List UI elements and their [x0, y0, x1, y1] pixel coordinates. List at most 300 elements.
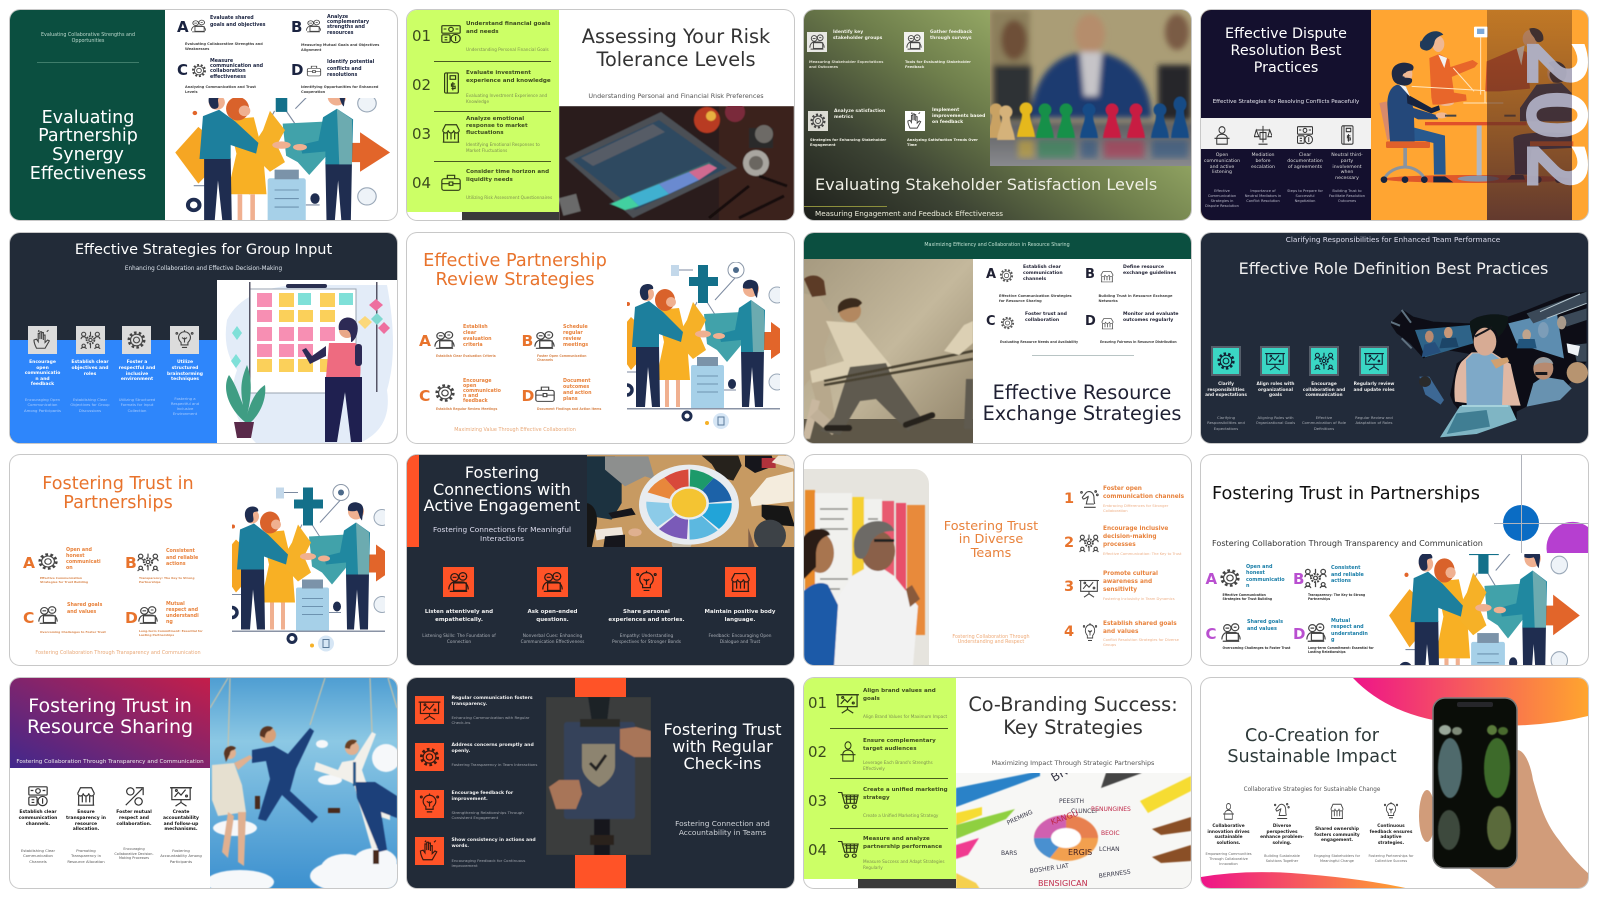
heading 3: Encourage [1311, 382, 1337, 387]
heading B: Analyze [327, 15, 348, 20]
heading B [327, 14, 369, 36]
heading 2: decision-making [1103, 534, 1157, 540]
letter B: B [1085, 267, 1095, 282]
note 04: Regularly [863, 865, 883, 870]
markers and mind map photo: BOSHER LIAT [1029, 863, 1070, 875]
panel: Fostering Trust with Regular Check-ins [407, 678, 794, 888]
number 01: 01 [412, 27, 431, 45]
heading 4: Continuous [1377, 824, 1405, 829]
note 1: Innovation [1219, 862, 1238, 866]
icon tile: stars and hands [415, 837, 444, 865]
heading 2 [66, 810, 106, 833]
icon: bulb [1383, 802, 1399, 820]
heading D: Identify potential [327, 60, 374, 65]
icon: money [1296, 125, 1314, 145]
heading 1: transparency. [452, 702, 487, 707]
heading 1: Regular communication fosters [452, 696, 533, 701]
heading 1: innovation drives [1207, 830, 1250, 835]
number 4: 4 [1064, 624, 1074, 640]
description 04: Utilizing Risk Assessment Questionnaires [466, 195, 552, 200]
note 4 [1368, 854, 1414, 864]
heading A: criteria [463, 343, 483, 348]
heading 4: language. [725, 617, 755, 623]
title [983, 383, 1181, 424]
title: Check-ins [684, 754, 761, 773]
description D [301, 85, 378, 94]
heading 01: Align brand values and [863, 688, 936, 694]
heading 3: collaboration and [1303, 388, 1345, 393]
icon: people [306, 20, 321, 32]
heading B [563, 325, 588, 349]
heading 2 [930, 30, 972, 41]
subtitle: Fostering Collaboration Through Transparency and Communication [1212, 538, 1483, 548]
item 1 note: Dispute Resolution [1205, 204, 1239, 208]
note 2: Effective Communication: The Key to Trust [1103, 552, 1181, 556]
title: Active Engagement [424, 496, 580, 515]
note 4 [160, 848, 202, 864]
heading D: Mutual [166, 602, 185, 607]
description C: Levels [185, 90, 198, 94]
handshake illustration [175, 98, 390, 220]
heading 3 [1314, 827, 1360, 844]
description 1: and Outcomes [809, 65, 838, 69]
item 4 text: necessary [1335, 176, 1359, 181]
title: Effective Strategies for Group Input [75, 242, 332, 258]
heading 3: Promote cultural [1103, 571, 1158, 577]
heading 2: solving. [1272, 841, 1292, 846]
heading 1: open [36, 366, 49, 371]
heading 02: experience and knowledge [466, 78, 551, 84]
heading C: collaboration [1025, 318, 1059, 323]
note B: Partnerships [139, 580, 161, 584]
icon: speaker [1214, 126, 1230, 145]
heading 3: Foster a [127, 360, 147, 365]
heading 01: and needs [466, 29, 499, 35]
footer: Maximizing Value Through Effective Collaboration [454, 427, 576, 433]
subtitle: Opportunities [72, 38, 104, 44]
icon: people [1305, 622, 1327, 643]
letter A: A [986, 267, 996, 282]
icon: target [839, 740, 857, 762]
heading B [1123, 265, 1176, 277]
subtitle: Evaluating Collaborative Strengths and [41, 33, 135, 38]
title: with Regular [672, 737, 773, 756]
note D [1308, 646, 1374, 654]
icon: people [137, 605, 159, 625]
title: Co-Creation for [1245, 726, 1379, 746]
heading B: actions [166, 562, 186, 567]
heading C: and values [1247, 626, 1277, 632]
title: Fostering Trust in Partnerships [1212, 484, 1480, 504]
dark footer strip [462, 212, 559, 221]
heading 1: Collaborative [1212, 824, 1245, 829]
note 3: Encouraging [123, 847, 145, 851]
heading A: honest [66, 554, 85, 559]
note 4 [171, 396, 199, 416]
heading A: n [1246, 583, 1249, 589]
note 3: Empathy: Understanding [620, 634, 673, 639]
heading 1: feedback [31, 382, 54, 387]
heading 2: allocation. [73, 827, 99, 832]
item 3 note [1287, 189, 1323, 204]
title: Effectiveness [30, 164, 146, 184]
note 2: Promoting [76, 848, 96, 853]
heading B: resources [327, 31, 354, 36]
icon tile: bulb [415, 790, 444, 818]
heading 4: Show consistency in actions and [452, 838, 536, 843]
panel: Effective Partnership Review Strategies [407, 233, 794, 443]
navy side panel [1201, 10, 1371, 221]
note C: Overcoming Challenges to Foster Trust [1222, 646, 1290, 650]
heading 1 [833, 30, 882, 41]
markers and mind map photo: BERRNESS [1098, 869, 1131, 880]
note D: Long-term Commitment: Essential for [1308, 646, 1374, 650]
item 4 text: when [1341, 170, 1353, 175]
heading 4: Establish shared goals [1103, 621, 1177, 627]
note 3: Formats for Input [121, 402, 153, 407]
note 2 [1256, 414, 1295, 426]
item 3 note: Negotiation [1295, 199, 1315, 203]
note 1 [1207, 414, 1245, 431]
title: Partnerships [63, 493, 173, 513]
panel: Fostering Connections with Active Engagement [407, 455, 794, 665]
number 02: 02 [412, 76, 431, 94]
panel: Assessing Your Risk Tolerance Levels [407, 10, 794, 220]
letter A: A [177, 18, 189, 36]
note A [1222, 593, 1272, 601]
acrobats in the sky photo [210, 678, 397, 889]
heading 3: Foster mutual [116, 810, 152, 815]
letter B: B [1293, 570, 1304, 588]
heading B [1331, 565, 1364, 585]
description A: Evaluating Collaborative Strengths and [185, 42, 263, 46]
subtitle: Fostering Collaboration Through Transparency and Communication [16, 759, 204, 765]
note B: Channels [537, 358, 553, 362]
title [663, 721, 782, 772]
icon tile: gears [415, 743, 444, 771]
title: Synergy [52, 145, 124, 165]
heading 04: Consider time horizon and [466, 169, 549, 175]
note 4: Feedback: Encouraging Open [708, 634, 772, 639]
markers and mind map photo: ERGIS [1068, 848, 1092, 857]
heading 3: Shared ownership [1315, 827, 1359, 832]
note 3 [1314, 854, 1360, 864]
note B: Building Trust in Resource Exchange [1098, 294, 1172, 298]
heading 03: Analyze emotional [466, 116, 524, 122]
subtitle: Fostering Connection and [675, 819, 770, 828]
letter D: D [1293, 625, 1305, 643]
description 2 [905, 60, 971, 69]
heading D: outcomes regularly [1123, 318, 1173, 323]
title: Fostering [465, 463, 539, 482]
note 2: Resource Allocation [67, 859, 105, 864]
title [424, 465, 580, 515]
heading 1: Encourage [29, 360, 56, 365]
icon: money [441, 25, 461, 44]
footer: Understanding and Respect [958, 640, 1024, 645]
note 1: Check-ins [452, 720, 470, 725]
title: Resource Sharing [27, 716, 193, 738]
note 1: Communication [28, 402, 57, 407]
heading 1: stakeholder groups [833, 36, 882, 41]
heading 03 [863, 786, 948, 802]
title: Effective Dispute [1225, 26, 1347, 42]
icon: gear [192, 64, 206, 78]
description B: Measuring Mutual Goals and Objectives [301, 43, 379, 47]
heading 1: communication [19, 816, 57, 821]
handshake illustration [1387, 554, 1588, 666]
note B: Transparency: The Key to Strong [139, 576, 194, 580]
subtitle: Enhancing Collaboration and Effective Decision-Making [125, 266, 282, 272]
item 4 text: party [1341, 159, 1353, 164]
accent line [804, 206, 887, 207]
note D: Long-term Commitment: Essential for [139, 629, 203, 633]
heading A: Open and [1246, 564, 1272, 570]
title: Exchange Strategies [983, 402, 1181, 424]
heading 1: Establish clear [19, 810, 57, 815]
title [423, 252, 607, 290]
note 3 [1302, 414, 1346, 431]
icon: briefcase [534, 384, 556, 403]
heading 04: partnership performance [863, 844, 942, 850]
note 4: Regular Review and [1355, 414, 1393, 420]
note 4: Participants [170, 859, 192, 864]
subtitle: Collaborative Strategies for Sustainable Change [1244, 787, 1380, 793]
note 1 [1205, 852, 1252, 866]
description A [185, 42, 263, 51]
icon: briefcase [441, 174, 461, 191]
note 1: Encouraging Open [25, 397, 60, 402]
heading C: and values [67, 610, 96, 614]
heading B: Consistent [166, 549, 195, 554]
title: Fostering Trust [663, 720, 782, 739]
icon tile 4 [1360, 347, 1388, 375]
icon: percent arrow [123, 785, 145, 807]
heading 3: communication [1305, 393, 1343, 398]
note B [1098, 294, 1172, 304]
description 01: Understanding Personal Financial Goals [466, 47, 549, 52]
heading 1 [452, 696, 533, 709]
description C [185, 85, 256, 94]
icon tile: shop [724, 567, 756, 597]
handshake illustration [627, 262, 780, 429]
heading 3: environment [121, 377, 153, 382]
note 3 [452, 810, 524, 820]
heading B: meetings [563, 343, 588, 348]
markers and mind map photo: BENSIGICAN [1038, 879, 1088, 888]
heading 2: roles [84, 372, 96, 377]
note 2: Fostering Transparency in Team Interactions [452, 762, 537, 766]
description 4: Time [907, 143, 917, 147]
heading C: open [463, 384, 476, 389]
note 4: Encouraging Feedback for Continuous [452, 858, 525, 862]
heading D [327, 59, 374, 78]
note 2: Nonverbal Cues: Enhancing [523, 634, 582, 639]
heading A: communication [1023, 271, 1063, 276]
number 02: 02 [808, 743, 827, 761]
heading 2: Diverse [1273, 824, 1291, 829]
icon: people [37, 605, 59, 625]
note A: Effective Communication [40, 576, 82, 580]
heading 4: and values [1103, 629, 1138, 635]
letter B: B [522, 332, 533, 350]
description 02 [466, 93, 547, 104]
letter D: D [1085, 314, 1096, 329]
heading 2 [71, 360, 109, 378]
heading 2: Ask open-ended [528, 609, 578, 615]
heading 01 [466, 21, 550, 35]
dark footer strip [858, 879, 956, 889]
description C: Analyzing Communication and Trust [185, 85, 256, 89]
heading D: plans [563, 397, 578, 402]
heading 3: fosters community [1314, 833, 1360, 838]
description D: Identifying Opportunities for Enhanced [301, 85, 378, 89]
heading 3: awareness and [1103, 579, 1152, 585]
title: Fostering Trust in [42, 474, 194, 494]
note 02: Leverage Each Brand's Strengths [863, 760, 933, 765]
title: Evaluating Stakeholder Satisfaction Levels [815, 175, 1157, 194]
note C: Overcoming Challenges to Foster Trust [40, 630, 106, 634]
heading 4: adaptive [1380, 835, 1402, 840]
heading D [166, 602, 199, 626]
heading 4 [932, 108, 985, 125]
white icon band [1201, 118, 1371, 149]
heading C: feedback [463, 399, 488, 404]
number 2: 2 [1064, 535, 1074, 551]
heading A: Establish [463, 325, 488, 330]
heading 2: organizational [1258, 388, 1293, 393]
heading C: collaboration [210, 69, 246, 74]
description 02: Evaluating Investment Experience and [466, 93, 547, 98]
heading 1 [19, 810, 57, 827]
icon: bulb [1082, 623, 1098, 643]
note 3: Meaningful Change [1320, 859, 1354, 863]
icon: cart [837, 839, 860, 859]
item 4 text: involvement [1332, 165, 1362, 170]
heading 4 [167, 360, 203, 383]
icon: chess [1079, 489, 1099, 509]
note 2: Organizational Goals [1256, 420, 1295, 425]
heading D: resolutions [327, 73, 357, 78]
heading D: ng [166, 620, 173, 625]
item 4 text [1331, 153, 1363, 182]
heading 1 [1103, 485, 1184, 501]
dividers [804, 678, 956, 879]
heading 1: and expectations [1205, 393, 1247, 398]
heading C [1025, 312, 1067, 324]
title: Effective Role Definition Best Practices [1239, 259, 1548, 278]
heading 1: solutions. [1217, 841, 1240, 846]
letter A: A [1206, 570, 1217, 588]
note B [1308, 593, 1365, 601]
heading 4: techniques [171, 377, 199, 382]
heading 1: communication channels [1103, 494, 1184, 500]
icon: gear [434, 383, 456, 403]
icon: briefcase [306, 66, 322, 76]
note 2: Building Sustainable [1264, 854, 1300, 858]
heading 4: Utilize [177, 360, 193, 365]
note 4 [1103, 638, 1179, 648]
heading B: exchange guidelines [1123, 271, 1176, 276]
heading 04 [863, 835, 942, 851]
heading 4: feedback ensures [1370, 830, 1412, 835]
note 1: Clarifying [1217, 414, 1235, 420]
item 1 text: communication [1204, 159, 1240, 164]
heading 2: Align roles with [1257, 382, 1294, 387]
description 03 [466, 142, 540, 153]
icon tile: gear bulb [631, 567, 662, 597]
subtitle: Measuring Engagement and Feedback Effectiveness [815, 209, 1003, 218]
heading 03: fluctuations [466, 130, 504, 136]
note 4: Environment [173, 411, 197, 416]
heading A: Evaluate shared [210, 16, 254, 21]
note 2: Aligning Roles with [1257, 414, 1294, 420]
heading B: regular [563, 331, 583, 336]
heading 4 [1103, 620, 1177, 636]
title: Fostering Trust in [28, 695, 192, 717]
item 2 note: Conflict Resolution [1246, 199, 1280, 203]
item 1 text: listening [1212, 170, 1232, 175]
heading 3: respect and [119, 816, 149, 821]
note 4: Fostering Partnerships for [1368, 854, 1414, 858]
note 3: Definitions [1314, 426, 1334, 430]
icon: gears [999, 268, 1014, 283]
item 3 note: Steps to Prepare for [1287, 189, 1323, 193]
title: Practices [1254, 60, 1318, 76]
note 3: Effective [1316, 414, 1332, 420]
heading 4 [163, 810, 199, 833]
markers and mind map photo: PEESITH [1059, 798, 1084, 805]
icon tile 1 [1212, 347, 1240, 375]
item 4 note: Building Trust to [1332, 189, 1362, 193]
heading B: Consistent [1331, 565, 1360, 571]
heading 01 [863, 687, 936, 703]
heading 1: Foster open [1103, 486, 1142, 492]
heading 2: transparency in [66, 816, 106, 821]
item 2 text: before [1255, 159, 1271, 164]
item 1 text: and active [1210, 165, 1234, 170]
note A: Effective Communication [1222, 593, 1266, 597]
blue lower panel [10, 340, 217, 444]
note 4: Groups [1103, 643, 1116, 647]
note 03: Create a Unified Marketing Strategy [863, 813, 938, 818]
heading 2: objectives and [72, 366, 108, 371]
title: Partnership [38, 126, 138, 146]
note 2: Objectives for Group [70, 402, 110, 407]
heading C: Encourage [463, 379, 492, 384]
note B: Transparency: The Key to Strong [1308, 593, 1365, 597]
description 3 [810, 138, 886, 147]
note 3 [612, 634, 681, 647]
icon tile 3 [1310, 347, 1338, 375]
footer: Fostering Collaboration Through [952, 635, 1030, 640]
heading 1: communicatio [25, 371, 60, 376]
photo of colleagues at wall [804, 469, 929, 666]
title: Co-Branding Success: [968, 693, 1178, 716]
note 2: Establishing Clear [73, 397, 107, 402]
note 3: Communication of Role [1302, 420, 1346, 425]
note A: Strategies for Trust Building [40, 580, 88, 584]
heading 4 [1370, 824, 1412, 847]
note B: Networks [1098, 299, 1118, 303]
number 1: 1 [1064, 491, 1074, 507]
heading 1 [25, 360, 60, 388]
description B: Alignment [301, 48, 321, 52]
heading A: communicati [66, 560, 101, 565]
note A: Strategies for Trust Building [1222, 597, 1272, 601]
subtitle: Interactions [480, 534, 524, 543]
note 1: Connection [447, 640, 471, 645]
